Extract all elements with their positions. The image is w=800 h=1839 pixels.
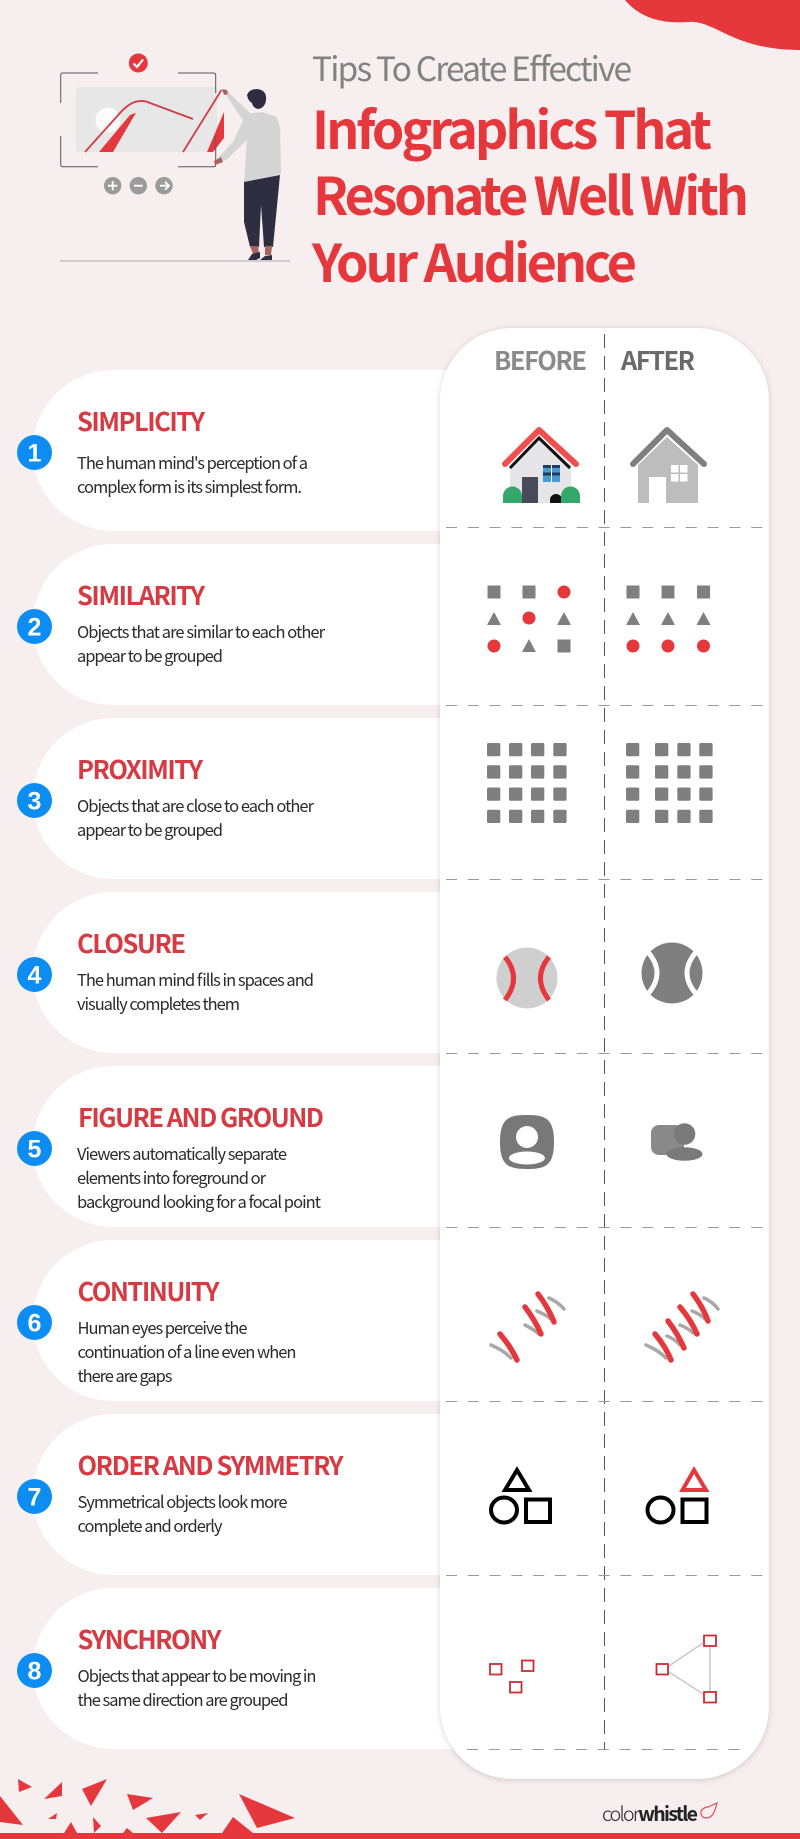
icon: colored house before	[503, 430, 580, 503]
decorative red blob top right	[625, 0, 800, 50]
row 6: continuity	[17, 1240, 470, 1401]
title line: subtitle: Tips To Create Effective	[312, 42, 632, 91]
icon: aligned shapes grid after	[626, 586, 710, 652]
number badge 1	[17, 435, 52, 470]
icon: gray house after	[633, 430, 704, 503]
number badge 6	[17, 1305, 52, 1340]
icon: baseball after	[642, 942, 702, 1004]
description: figure and ground: Viewers automatically separate	[77, 1141, 287, 1165]
heading: figure and ground: FIGURE AND GROUND	[78, 1098, 324, 1135]
description: figure and ground	[77, 1141, 321, 1213]
heading: proximity: PROXIMITY	[77, 750, 203, 787]
row 2: similarity	[17, 544, 470, 705]
number badge 8	[17, 1653, 52, 1688]
number badge 3: 3	[28, 788, 41, 816]
icon: even square grid before	[487, 743, 567, 823]
icon: check badge	[129, 54, 148, 72]
icon: contact shapes after	[651, 1123, 702, 1161]
chart panel	[61, 73, 224, 167]
heading: closure: CLOSURE	[77, 924, 186, 961]
ground line	[60, 260, 290, 262]
description: synchrony: Objects that appear to be moving in	[78, 1663, 316, 1687]
person figure	[214, 89, 281, 261]
description: continuity: there are gaps	[78, 1363, 173, 1387]
description: order and symmetry: complete and orderly	[78, 1513, 223, 1537]
heading: synchrony: SYNCHRONY	[78, 1620, 222, 1657]
description: simplicity	[77, 450, 308, 498]
column heading: before: BEFORE	[494, 341, 587, 378]
title line: main heading: Your Audience	[311, 222, 637, 297]
heading: continuity: CONTINUITY	[78, 1272, 220, 1309]
before and after panel	[440, 328, 769, 1779]
description: closure: The human mind fills in spaces and	[77, 967, 314, 991]
title line: main heading: Infographics That	[312, 89, 712, 164]
icon: broken spring before	[491, 1294, 564, 1360]
number badge 8: 8	[28, 1658, 42, 1686]
row 3: proximity	[17, 718, 470, 879]
description: order and symmetry	[78, 1489, 288, 1537]
icon: red triangle with black shapes after	[648, 1470, 706, 1522]
description: synchrony	[78, 1663, 316, 1711]
zoom control buttons	[104, 177, 173, 194]
icon: continuous spring after	[646, 1294, 718, 1360]
number badge 7: 7	[28, 1484, 41, 1512]
title	[311, 42, 749, 297]
description: continuity: Human eyes perceive the	[78, 1315, 248, 1339]
title line: main heading: Resonate Well With	[313, 155, 749, 230]
heading: similarity: SIMILARITY	[77, 576, 205, 613]
number badge 6: 6	[28, 1310, 41, 1338]
description: continuity: continuation of a line even when	[78, 1339, 296, 1363]
description: figure and ground: elements into foreground or	[77, 1165, 267, 1189]
header illustration: person adjusting chart	[60, 54, 290, 262]
bottom red bar	[0, 1833, 800, 1839]
icon: baseball before	[496, 948, 558, 1008]
icon: black outline shapes before	[491, 1470, 550, 1522]
row 1: simplicity	[17, 370, 470, 531]
title line: main heading	[311, 89, 749, 297]
description: closure	[77, 967, 314, 1015]
description: proximity: appear to be grouped	[77, 817, 223, 841]
icon: mixed shapes grid before	[487, 586, 571, 652]
number badge 4: 4	[28, 962, 42, 990]
description: similarity	[77, 619, 326, 667]
icon: connected squares after	[656, 1636, 716, 1702]
description: order and symmetry: Symmetrical objects look more	[78, 1489, 288, 1513]
number badge 1: 1	[28, 440, 42, 468]
heading: order and symmetry: ORDER AND SYMMETRY	[78, 1446, 344, 1483]
row 4: closure	[17, 892, 470, 1053]
row 8: synchrony	[17, 1588, 470, 1749]
number badge 7	[17, 1479, 52, 1514]
number badge 3	[17, 783, 52, 818]
description: closure: visually completes them	[77, 991, 240, 1015]
column heading: after: AFTER	[620, 341, 695, 378]
number badge 4	[17, 957, 52, 992]
description: synchrony: the same direction are grouped	[78, 1687, 288, 1711]
icon: grouped square grid after	[626, 743, 713, 823]
description: continuity	[78, 1315, 296, 1387]
red triangle confetti decoration	[0, 1779, 295, 1833]
icon: contact card before	[500, 1115, 554, 1169]
description: proximity	[77, 793, 315, 841]
row 7: order and symmetry	[17, 1414, 470, 1575]
description: simplicity: The human mind's perception of a	[77, 450, 308, 474]
description: simplicity: complex form is its simplest form.	[77, 474, 302, 498]
number badge 2	[17, 609, 52, 644]
icon: whistle	[701, 1803, 717, 1818]
number badge 5: 5	[28, 1136, 42, 1164]
description: similarity: Objects that are similar to each other	[77, 619, 326, 643]
heading: simplicity: SIMPLICITY	[77, 402, 205, 439]
icon: scattered squares before	[490, 1660, 534, 1692]
description: figure and ground: background looking for a focal point	[77, 1189, 321, 1213]
logo: colorwhistle: colorwhistle	[602, 1798, 698, 1827]
description: similarity: appear to be grouped	[77, 643, 223, 667]
row 5: figure and ground	[17, 1066, 470, 1227]
number badge 5	[17, 1131, 52, 1166]
number badge 2: 2	[28, 614, 41, 642]
description: proximity: Objects that are close to each other	[77, 793, 315, 817]
